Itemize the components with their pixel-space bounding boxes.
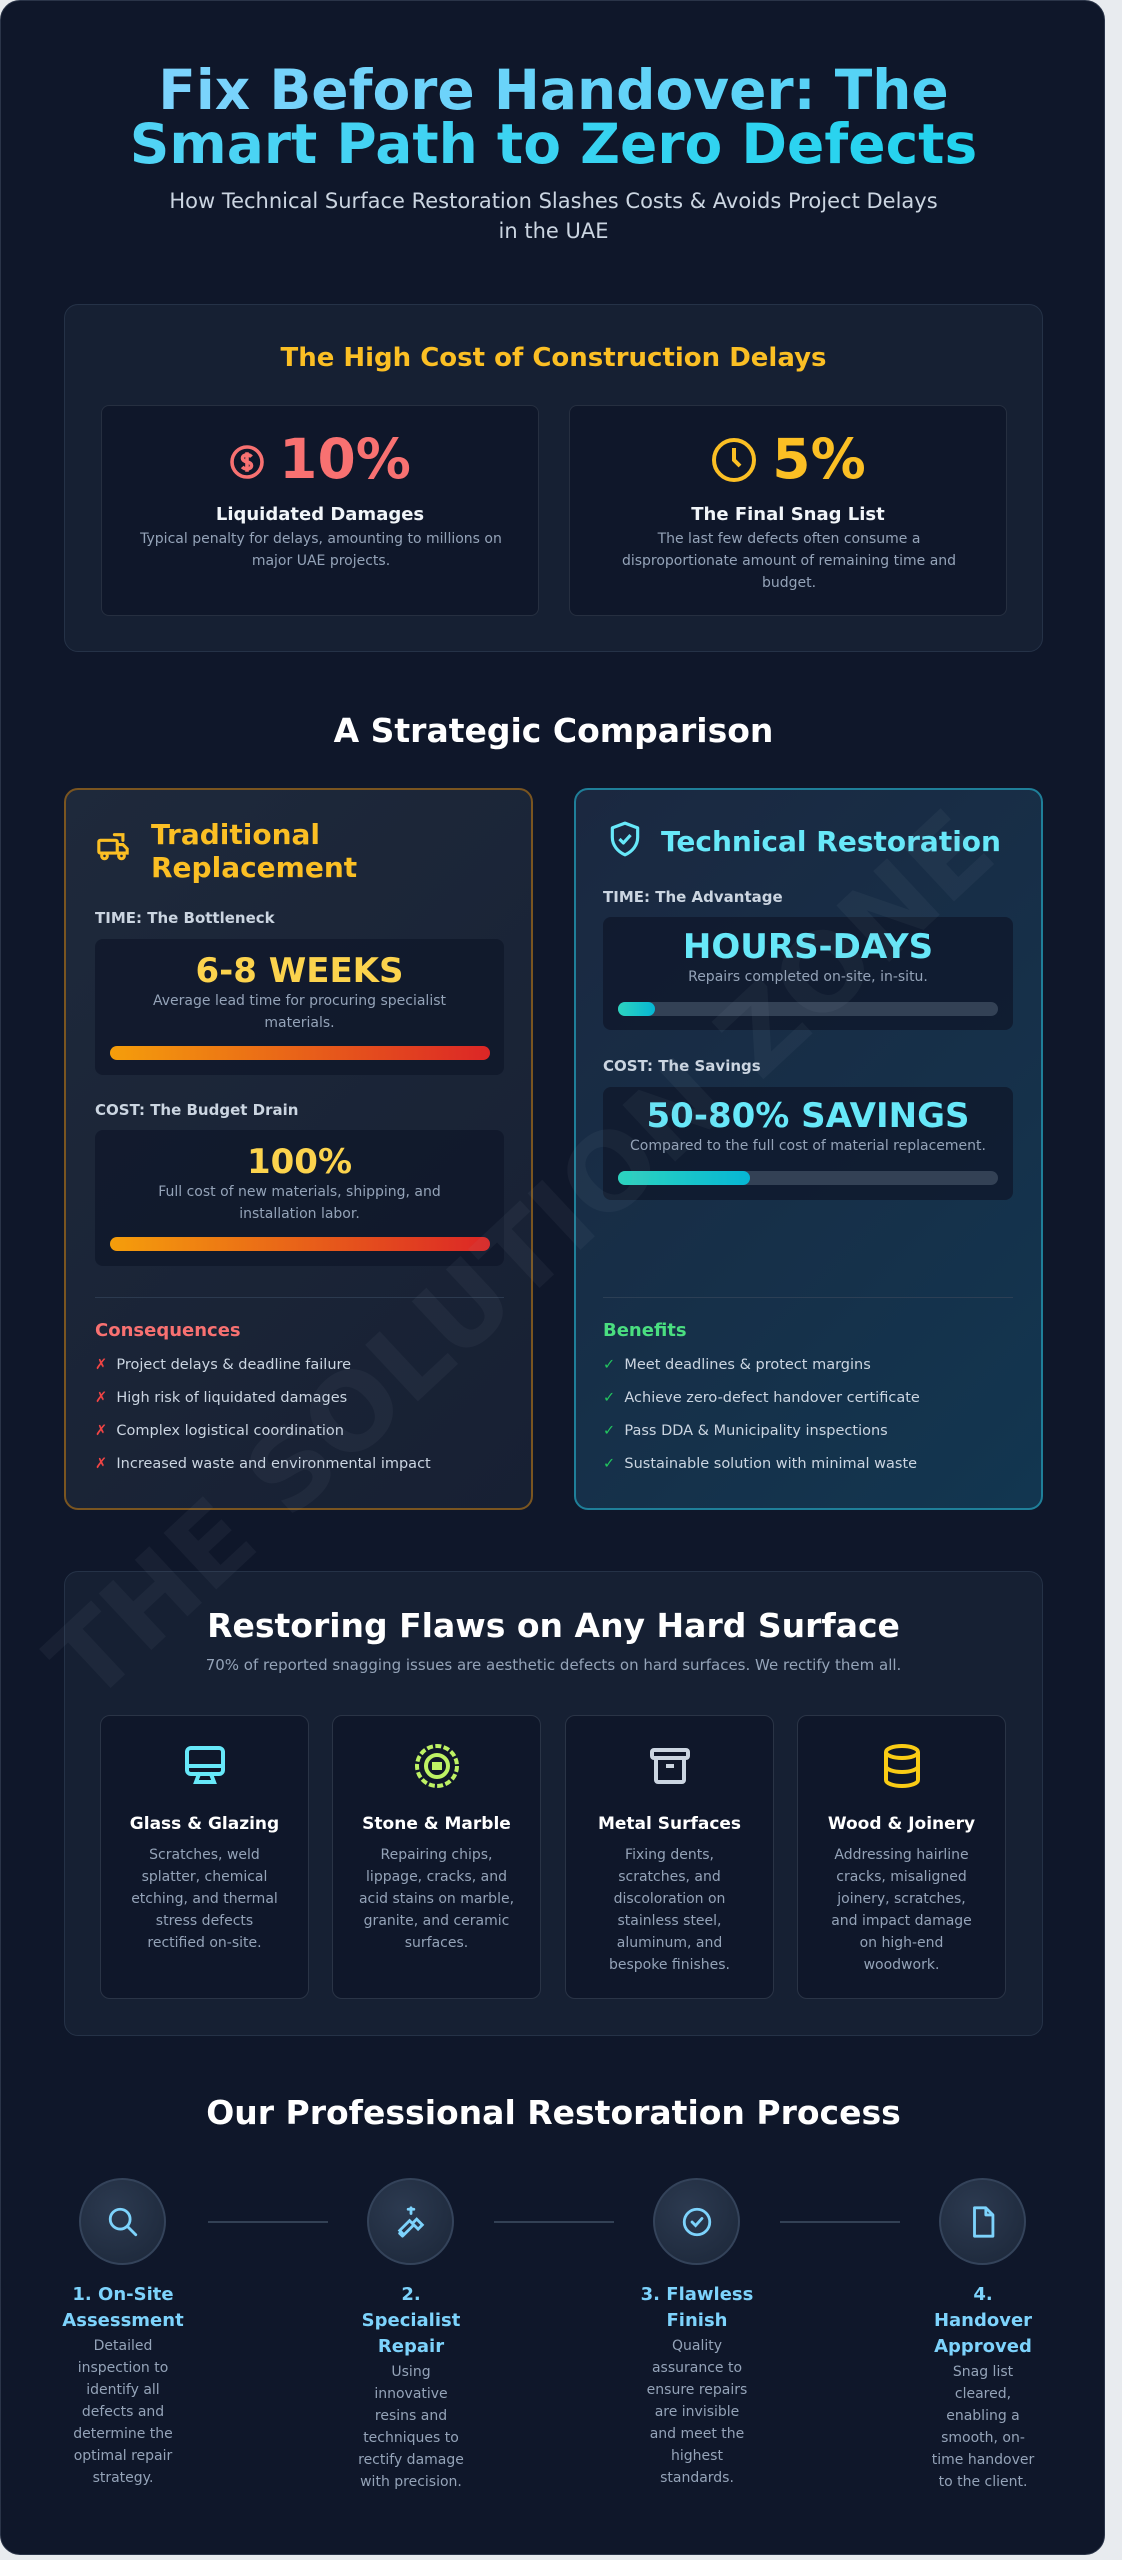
icon: step 3 check [653,2178,740,2265]
subtitle: in the UAE [499,219,608,243]
icon: step 2 tools [367,2178,454,2265]
step 3: ensure repairs [647,2382,747,2398]
step 1: inspection to [78,2360,168,2376]
step 2: Using [391,2364,431,2380]
card: metal: scratches, and [618,1869,721,1885]
subtitle [169,189,938,243]
benefits list: ✓ Achieve zero-defect handover certificate [603,1390,920,1406]
box: savings: 50-80% SAVINGS [647,1096,969,1136]
stat number 5% [712,427,866,491]
consequences list: ✗ Complex logistical coordination [95,1423,344,1439]
title: Technical Restoration [661,825,1001,858]
consequences list: ✗ High risk of liquidated damages [95,1390,347,1406]
card: stone: Stone & Marble [362,1814,511,1834]
box: savings [603,1087,1013,1200]
benefits list: ✓ Meet deadlines & protect margins [603,1357,871,1373]
box: 100%: Full cost of new materials, shipping, and installation labor. [158,1184,441,1222]
box: 100%: 100% [247,1142,352,1182]
card: stone: granite, and ceramic [364,1913,509,1929]
card: metal: aluminum, and [617,1935,722,1951]
box: weeks: Average lead time for procuring specialist materials. [153,993,446,1031]
panel: cost of delays [64,304,1043,652]
consequences list: ✗ Increased waste and environmental impact [95,1456,431,1472]
subtitle: How Technical Surface Restoration Slashes Costs & Avoids Project Delays [169,189,938,213]
label time: TIME: The Advantage [603,888,783,906]
card: metal: stainless steel, [617,1913,722,1929]
step 2: techniques to [363,2430,459,2446]
benefits list: ✓ Sustainable solution with minimal waste [603,1456,917,1472]
box: weeks: 6-8 WEEKS [195,951,404,991]
box: savings: Compared to the full cost of material replacement. [630,1138,986,1154]
card: stone: Repairing chips, [380,1847,492,1863]
label: The Final Snag List [691,504,885,525]
step 1: strategy. [93,2470,153,2486]
step 4 [932,2284,1034,2490]
card: wood: woodwork. [864,1957,939,1973]
icon: truck [97,833,129,860]
box: weeks [95,939,504,1075]
label cost: COST: The Savings [603,1057,761,1075]
card: glass: stress defects [156,1913,253,1929]
heading: strategic comparison: A Strategic Comparison [334,711,773,750]
step 3: and meet the [650,2426,744,2442]
title: Smart Path to Zero Defects [130,112,977,176]
step 4: Approved [934,2336,1032,2357]
panel: hard surfaces [64,1571,1043,2036]
step 4: enabling a [946,2408,1020,2424]
step 2: Specialist [362,2310,460,2331]
label time: TIME: The Bottleneck [95,909,275,927]
icon: shield [610,822,640,856]
step 2: resins and [375,2408,447,2424]
step 3: are invisible [655,2404,739,2420]
step 1: Detailed [94,2338,152,2354]
step 1: optimal repair [74,2448,172,2464]
desc: Typical penalty for delays, amounting to millions on major UAE projects. [140,531,502,569]
box: hours [603,917,1013,1030]
heading: Restoring Flaws on Any Hard Surface [207,1606,900,1645]
step 3: Quality [672,2338,722,2354]
step 3: assurance to [652,2360,742,2376]
step 3: Finish [666,2310,727,2331]
step 4: 4. [973,2284,993,2305]
box: hours: HOURS-DAYS [683,927,933,967]
card: wood: and impact damage [831,1913,972,1929]
title [151,818,357,884]
label cost: COST: The Budget Drain [95,1101,298,1119]
card: wood: on high-end [860,1935,943,1951]
desc: The last few defects often consume a disproportionate amount of remaining time and budget. [622,531,956,591]
step 4: Snag list [953,2364,1013,2380]
card: stone: lippage, cracks, and [366,1869,507,1885]
card: wood: Wood & Joinery [828,1814,975,1834]
stat number 10%: 10% [279,427,411,491]
card: glass: rectified on-site. [147,1935,262,1951]
card: glass: Scratches, weld [149,1847,260,1863]
step 4: cleared, [955,2386,1011,2402]
step 1: identify all [86,2382,160,2398]
step 3: highest [671,2448,723,2464]
step 1 [62,2284,184,2486]
card: stone [332,1715,541,1999]
card: stone: acid stains on marble, [359,1891,514,1907]
icon: step 4 document [939,2178,1026,2265]
title [130,58,977,176]
step 2: with precision. [360,2474,462,2490]
title: Replacement [151,851,357,884]
step 4: smooth, on- [941,2430,1025,2446]
subheading: 70% of reported snagging issues are aesthetic defects on hard surfaces. We rectify them all. [206,1656,901,1674]
icon: gear [415,1744,459,1788]
step 1: determine the [73,2426,173,2442]
card: glass [100,1715,309,1999]
title: Fix Before Handover: The [158,58,949,122]
card: wood: Addressing hairline [834,1847,969,1863]
consequences heading: Consequences [95,1320,241,1341]
step 1: defects and [82,2404,164,2420]
step 2: rectify damage [358,2452,464,2468]
panel: technical restoration [574,788,1043,1510]
step 3: 3. Flawless [641,2284,753,2305]
step 4: Handover [934,2310,1032,2331]
stat number 5%: 5% [772,427,866,491]
step 1: Assessment [62,2310,184,2331]
step 3 [641,2284,753,2486]
box: hours: Repairs completed on-site, in-situ. [688,969,928,985]
card: wood: cracks, misaligned [836,1869,967,1885]
card: metal: Fixing dents, [625,1847,714,1863]
benefits list [603,1357,920,1472]
benefits heading: Benefits [603,1320,687,1341]
card: metal [565,1715,774,1999]
card: metal: Metal Surfaces [598,1814,741,1834]
card: stone: surfaces. [405,1935,468,1951]
heading: process: Our Professional Restoration Process [206,2093,901,2132]
step 2 [358,2284,464,2490]
step 1: 1. On-Site [72,2284,174,2305]
consequences list [95,1357,431,1472]
step 3: standards. [660,2470,734,2486]
step 4: to the client. [939,2474,1027,2490]
heading: high cost: The High Cost of Construction Delays [280,343,827,373]
card: glass: etching, and thermal [131,1891,278,1907]
icon: database [884,1744,920,1788]
icon: step 1 search [79,2178,166,2265]
icon: monitor [185,1746,225,1784]
stat: snag list [569,405,1007,616]
box: 100% [95,1130,504,1266]
icon: box [650,1748,690,1784]
step 4: time handover [932,2452,1034,2468]
card: wood [797,1715,1006,1999]
watermark: THE SOLUTION ZONE [24,787,1017,1724]
stat: liquidated damages [101,405,539,616]
step 2: Repair [378,2336,444,2357]
label: Liquidated Damages [216,504,424,525]
panel: traditional replacement [64,788,533,1510]
card: metal: bespoke finishes. [609,1957,730,1973]
card: glass: Glass & Glazing [130,1814,279,1834]
card: wood: joinery, scratches, [837,1891,966,1907]
card: metal: discoloration on [614,1891,725,1907]
card: glass: splatter, chemical [142,1869,267,1885]
step 2: 2. [401,2284,421,2305]
benefits list: ✓ Pass DDA & Municipality inspections [603,1423,888,1439]
title: Traditional [151,818,320,851]
consequences list: ✗ Project delays & deadline failure [95,1357,351,1373]
step 2: innovative [374,2386,448,2402]
